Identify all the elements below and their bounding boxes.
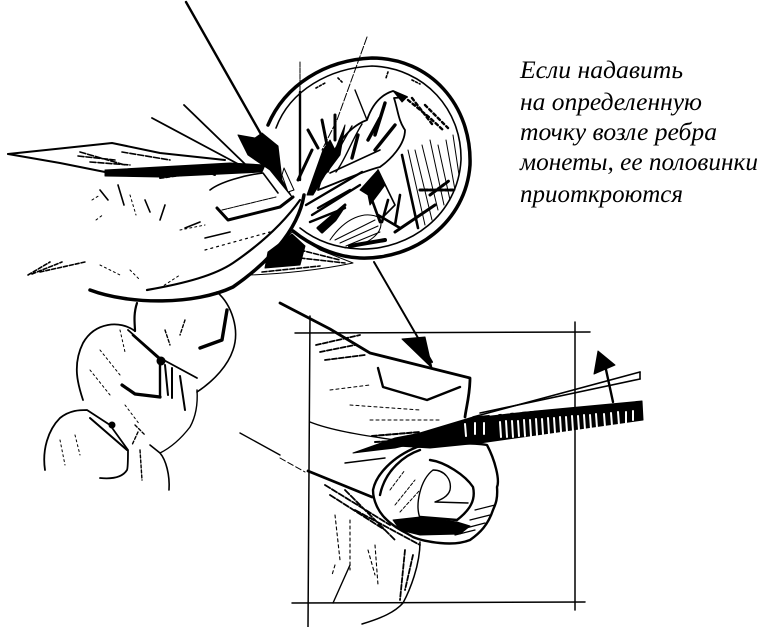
detail view construction frame xyxy=(292,316,590,627)
caption text: точку возле ребра xyxy=(520,119,717,146)
detail view fingertip circle xyxy=(373,443,498,544)
caption text xyxy=(519,57,758,208)
thumb holding coin xyxy=(8,143,304,301)
pressing arrow on coin edge xyxy=(152,2,294,197)
caption text: на определенную xyxy=(520,89,702,116)
up arrow at coin opening xyxy=(594,351,615,402)
wheat and rays xyxy=(330,215,381,248)
coin halves prying open xyxy=(380,372,643,448)
laurel branch dark sprays xyxy=(307,125,345,195)
caption text: монеты, ее половинки xyxy=(519,149,758,176)
shadow under thumb xyxy=(250,232,353,275)
caption text: Если надавить xyxy=(519,57,683,84)
caption text: приоткроются xyxy=(520,181,683,208)
arrow from coin to detail view xyxy=(374,262,432,368)
detail view finger with nail xyxy=(280,303,470,624)
folded fingers xyxy=(44,292,280,490)
eagle head and body xyxy=(318,91,407,190)
coin with eagle xyxy=(268,37,470,258)
